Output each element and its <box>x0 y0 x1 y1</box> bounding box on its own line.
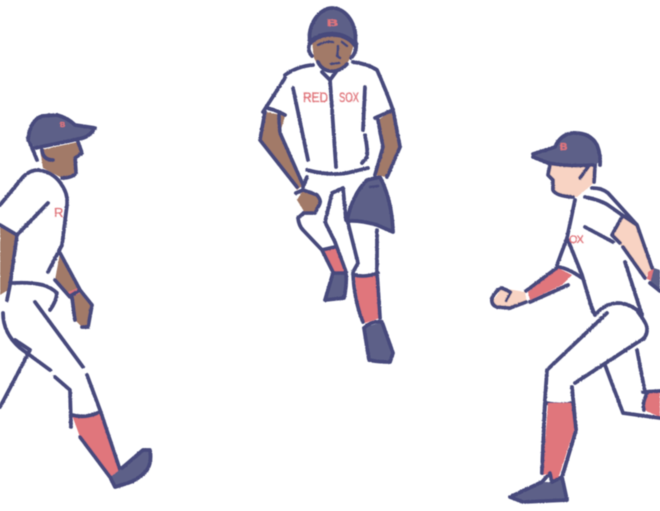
right player: sock and shoe <box>510 403 576 502</box>
right player: cap: B <box>560 142 567 153</box>
center player: hand <box>296 190 320 213</box>
center player: right leg <box>348 223 393 362</box>
right player: forearm and hand <box>492 267 582 308</box>
center player: left leg <box>298 177 346 300</box>
left player: cap: B <box>60 122 65 129</box>
center player: glove <box>347 177 393 232</box>
jersey lettering: RED <box>303 89 328 105</box>
left player: shoe <box>110 450 151 487</box>
right player: head <box>548 165 595 197</box>
center player: cap: B <box>327 18 339 28</box>
left player <box>0 115 151 487</box>
center player: cap <box>310 8 355 45</box>
center player: jersey: SOX <box>339 90 359 105</box>
left player: jersey and arm <box>0 170 67 310</box>
right player: jersey <box>557 188 642 315</box>
center player: arms <box>260 110 400 190</box>
right player: pants <box>542 303 660 477</box>
right player: throwing arm <box>613 215 660 291</box>
left player: cap <box>28 115 95 148</box>
right player <box>492 133 660 502</box>
left player: head <box>28 138 82 178</box>
left player: pants and sock <box>0 302 120 477</box>
center player: jersey <box>263 62 393 174</box>
left player: far arm and hand <box>55 253 92 327</box>
jersey letter: R <box>54 205 63 220</box>
jersey letters: OX <box>569 234 585 246</box>
right player: cap <box>533 133 600 166</box>
center player <box>260 8 400 362</box>
center player: head <box>309 36 356 72</box>
